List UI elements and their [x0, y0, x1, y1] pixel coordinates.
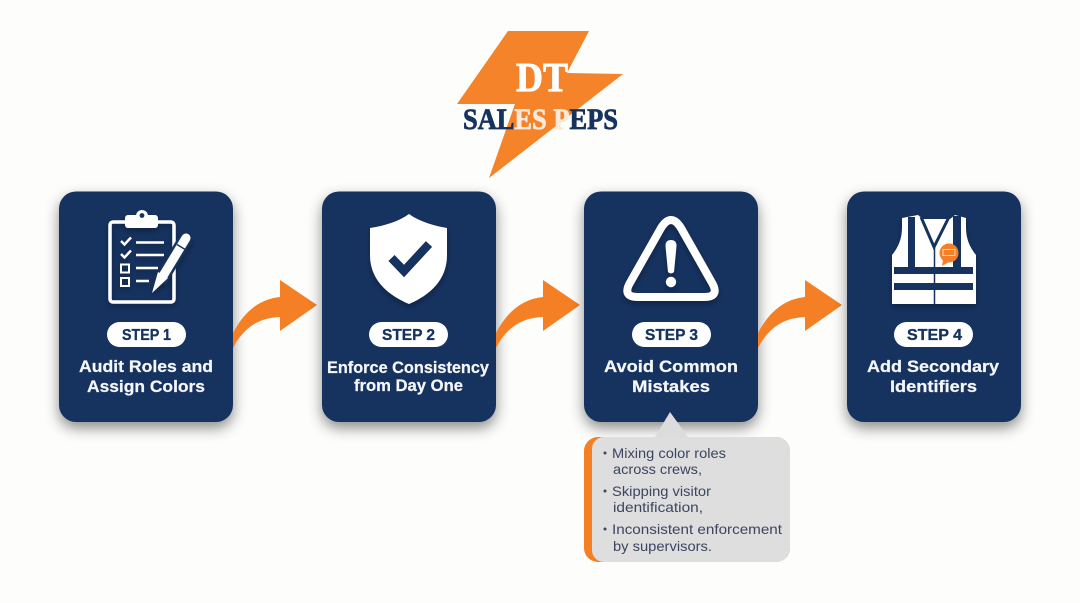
arrow: step 3 to step 4	[758, 280, 842, 348]
step 4 pill: STEP 4	[907, 327, 962, 344]
card background	[59, 192, 233, 422]
arrow: step 1 to step 2	[233, 280, 317, 348]
step 1 title: Assign Colors	[87, 377, 205, 396]
logo: DT Sales Peps	[457, 31, 623, 178]
card background	[322, 192, 496, 422]
logo text Sales Peps: SALES PEPS	[463, 103, 618, 136]
icon: shield with check	[370, 214, 447, 304]
panel: step 4	[847, 192, 1021, 422]
step 2 title: from Day One	[354, 376, 463, 395]
mistake 2: identification,	[613, 499, 703, 515]
mistake 2	[604, 483, 711, 515]
panel: step 3	[584, 192, 758, 422]
step 4 title	[867, 357, 1000, 396]
step 2 pill	[369, 322, 448, 347]
step 2 pill: STEP 2	[382, 327, 435, 344]
mistake 1: Mixing color roles	[612, 445, 726, 461]
callout: common mistakes	[584, 412, 802, 562]
step 3 pill	[632, 322, 711, 347]
step 2 title: Enforce Consistency	[327, 358, 490, 377]
icon: safety vest	[892, 215, 976, 304]
step 2 title	[327, 358, 490, 395]
step 3 title: Mistakes	[632, 377, 710, 396]
panel: step 2	[322, 192, 496, 422]
mistake 1	[604, 445, 726, 477]
step 1 pill	[107, 322, 186, 347]
card background	[584, 192, 758, 422]
step 1 title: Audit Roles and	[79, 357, 213, 376]
logo lightning bolt	[457, 31, 623, 178]
callout box with orange edge	[584, 437, 802, 562]
step 3 title	[604, 357, 738, 396]
mistake 1: across crews,	[613, 461, 702, 477]
mistake 3: Inconsistent enforcement	[612, 521, 782, 537]
step 3 title: Avoid Common	[604, 357, 738, 376]
icon: warning triangle	[627, 220, 715, 297]
logo text DT: DT	[516, 54, 568, 100]
step 1 pill: STEP 1	[122, 327, 171, 344]
step 4 pill	[894, 322, 973, 347]
mistake 3	[604, 521, 782, 554]
step 3 pill: STEP 3	[645, 327, 698, 344]
step 4 title: Add Secondary	[867, 357, 1000, 376]
mistake 2: Skipping visitor	[612, 483, 711, 499]
panel: step 1	[59, 192, 233, 422]
card background	[847, 192, 1021, 422]
callout pointer	[655, 412, 688, 437]
step 1 title	[79, 357, 213, 396]
step 4 title: Identifiers	[890, 377, 977, 396]
icon: clipboard with pencil	[110, 210, 186, 302]
arrow: step 2 to step 3	[496, 280, 580, 348]
mistake 3: by supervisors.	[613, 538, 712, 554]
